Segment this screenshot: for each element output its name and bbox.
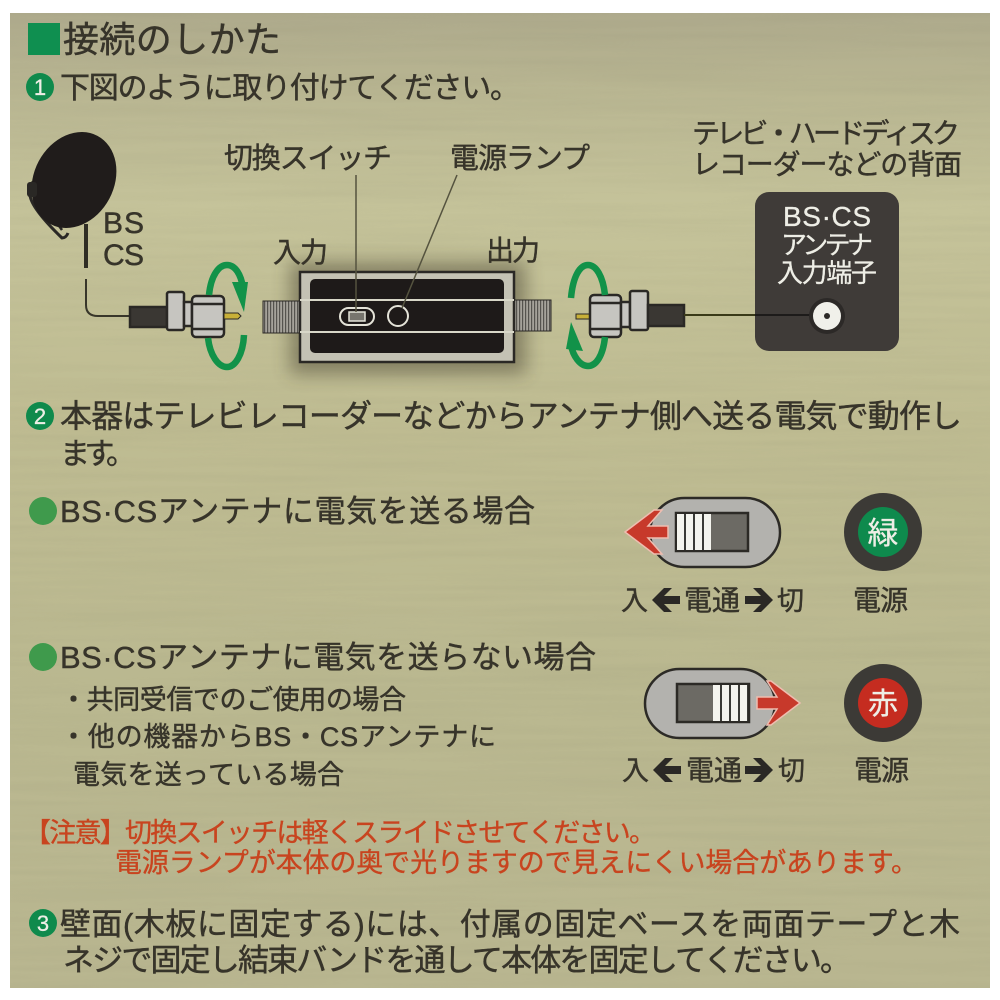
connection diagram (15, 117, 962, 374)
antenna input panel: BS·CS (783, 201, 871, 232)
label: TV and recorder rear: テレビ・ハードディスク (692, 118, 960, 149)
case: no power details: ・他の機器からBS・CSアンテナに (60, 722, 496, 752)
case: no power details: ・共同受信でのご使用の場合 (60, 685, 406, 715)
label: BS CS (103, 207, 144, 272)
switch legend: top (621, 585, 804, 616)
title: 接続のしかた (63, 19, 281, 60)
leader line: switch (355, 175, 357, 312)
left connector (130, 292, 241, 337)
label: switch: 切換スイッチ (224, 142, 392, 175)
lamp: green: 緑 (868, 516, 898, 551)
case: send power heading: BS·CSアンテナに電気を送る場合 (60, 494, 535, 529)
switch: off position (645, 669, 800, 738)
switch legend: bottom: 切 (778, 756, 805, 786)
cable to antenna input (684, 314, 820, 316)
rotation arrow: right (566, 265, 605, 366)
step 2 instruction (26, 398, 962, 471)
case: no power details: 電気を送っている場合 (73, 760, 344, 790)
antenna input panel: アンテナ (781, 230, 873, 260)
antenna input panel: 入力端子 (777, 258, 877, 288)
lamp: red (844, 664, 922, 742)
step 2 instruction: 2 (34, 404, 46, 429)
caution note (24, 818, 918, 878)
switch legend: bottom: 電通 (686, 755, 742, 786)
label: TV and recorder rear: レコーダーなどの背面 (692, 149, 962, 180)
switch legend: bottom (622, 755, 805, 786)
switch: on position (625, 498, 780, 567)
step 1 instruction: 下図のように取り付けてください。 (60, 72, 520, 105)
switch legend: bottom: 入 (622, 756, 649, 786)
caution note: 【注意】切換スイッチは軽くスライドさせてください。 (24, 818, 656, 848)
step 2 instruction: ます。 (60, 438, 136, 471)
antenna cable (84, 224, 88, 268)
step 3 instruction: ネジで固定し結束バンドを通して本体を固定してください。 (63, 943, 851, 978)
rotation arrow: left (208, 265, 248, 367)
step 2 instruction: 本器はテレビレコーダーなどからアンテナ側へ送る電気で動作し (60, 398, 962, 434)
lamp legend: bottom: 電源 (854, 755, 909, 786)
device body (263, 262, 551, 374)
step 3 instruction: 3 (37, 911, 49, 936)
step 3 instruction (29, 907, 960, 978)
switch legend: top: 電通 (684, 585, 740, 616)
lamp legend: top: 電源 (853, 585, 908, 616)
lamp: green (844, 493, 922, 571)
label: TV and recorder rear (692, 118, 962, 180)
antenna input panel (755, 192, 899, 351)
label: BS CS: CS (103, 239, 144, 272)
icon: satellite dish (15, 117, 133, 243)
caution note: 電源ランプが本体の奥で光りますので見えにくい場合があります。 (115, 848, 918, 878)
step 3 instruction: 壁面(木板に固定する)には、付属の固定ベースを両面テープと木 (60, 907, 960, 942)
label: input: 入力 (273, 237, 328, 268)
switch legend: top: 切 (777, 586, 804, 616)
cable lower run (86, 279, 130, 316)
switch legend: top: 入 (621, 586, 648, 616)
leader line: lamp (402, 175, 457, 308)
label: BS CS: BS (103, 207, 144, 240)
step 1 instruction: 1 (34, 75, 46, 100)
label: output: 出力 (486, 235, 540, 266)
case: no power details (60, 685, 496, 790)
lamp: red: 赤 (868, 688, 898, 721)
case: no power heading: BS·CSアンテナに電気を送らない場合 (60, 640, 596, 675)
label: power lamp: 電源ランプ (450, 142, 590, 175)
right connector (576, 291, 684, 337)
